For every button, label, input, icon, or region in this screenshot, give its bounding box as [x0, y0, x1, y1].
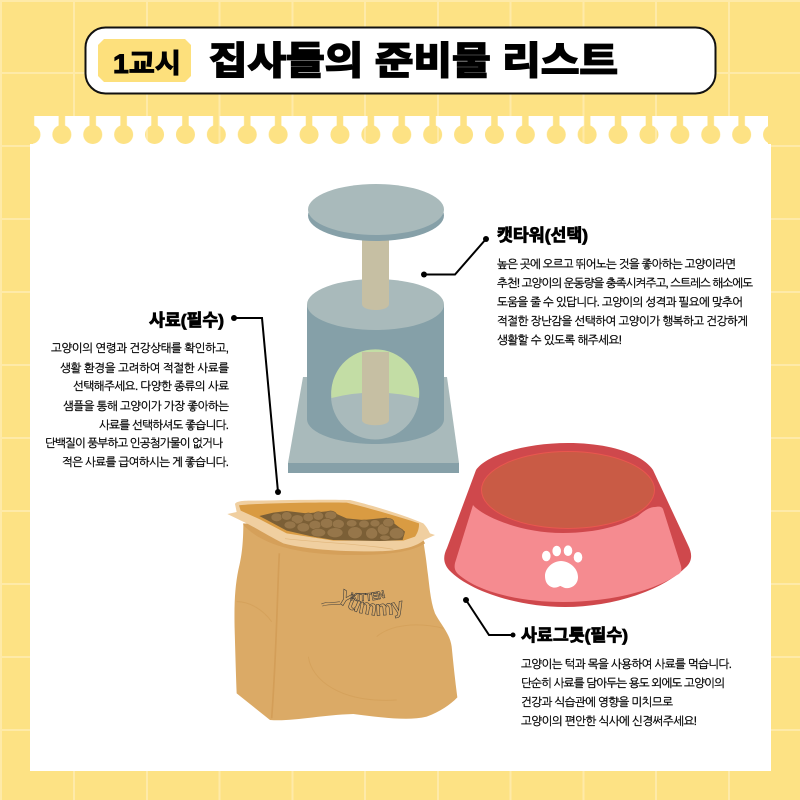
kibble pieces	[271, 511, 404, 540]
arrow: leader to kibble bag	[231, 315, 281, 495]
text block: cat tower: 도움을 줄 수 있답니다. 고양이의 성격과 필요에 맞추어	[497, 296, 743, 309]
text block: cat tower: 추천! 고양이의 운동량을 충족시켜주고, 스트레스 해소에도	[497, 277, 753, 290]
text block: cat tower: 적절한 장난감을 선택하여 고양이가 행복하고 건강하게	[497, 315, 748, 328]
callout: cat tower	[421, 226, 753, 347]
text block: kibble: 단백질이 풍부하고 인공첨가물이 없거나	[45, 437, 223, 450]
icon: paw print	[542, 545, 582, 588]
text block: cat tower: 높은 곳에 오르고 뛰어노는 것을 좋아하는 고양이라면	[497, 258, 736, 271]
text block: kibble: 적은 사료를 급여하시는 게 좋습니다.	[62, 456, 229, 469]
heading: kibble: 사료(필수)	[149, 311, 224, 330]
panel: notepaper sheet with punched holes	[30, 116, 771, 771]
text block: food bowl: 건강과 식습관에 영향을 미치므로	[521, 696, 673, 709]
text block: kibble: 사료를 선택하셔도 좋습니다.	[99, 419, 229, 432]
text block: food bowl: 고양이는 턱과 목을 사용하여 사료를 먹습니다.	[521, 658, 732, 671]
text block: kibble: 생활 환경을 고려하여 적절한 사료를	[60, 362, 229, 375]
text block: food bowl: 단순히 사료를 담아두는 용도 외에도 고양이의	[521, 677, 725, 690]
text block: food bowl: 고양이의 편안한 식사에 신경써주세요!	[521, 715, 697, 728]
text block: kibble: 샘플을 통해 고양이가 가장 좋아하는	[63, 400, 229, 413]
text block: kibble: 선택해주세요. 다양한 종류의 사료	[73, 380, 229, 393]
illustration: kibble bag	[228, 500, 458, 720]
text block: kibble	[45, 342, 229, 469]
text block: food bowl	[521, 658, 732, 728]
illustration: food bowl	[444, 443, 691, 607]
lesson badge	[98, 39, 191, 82]
callout: food bowl	[463, 597, 732, 728]
bag logo: Yummy	[340, 588, 402, 618]
heading: food bowl: 사료그릇(필수)	[521, 626, 628, 645]
arrow: leader to bowl	[463, 597, 516, 638]
title text: 집사들의 준비물 리스트	[209, 41, 618, 83]
text block: kibble: 고양이의 연령과 건강상태를 확인하고,	[51, 342, 229, 355]
text block: cat tower: 생활할 수 있도록 해주세요!	[497, 334, 622, 347]
heading: cat tower: 캣타워(선택)	[497, 226, 588, 245]
callout: kibble	[45, 311, 281, 495]
illustration: cat tower	[288, 184, 459, 473]
lesson badge: 1교시	[113, 49, 181, 79]
title bar	[86, 28, 716, 94]
bag logo: KITTEN	[350, 590, 386, 602]
text block: cat tower	[497, 258, 753, 347]
arrow: leader to cat tower	[421, 236, 489, 278]
